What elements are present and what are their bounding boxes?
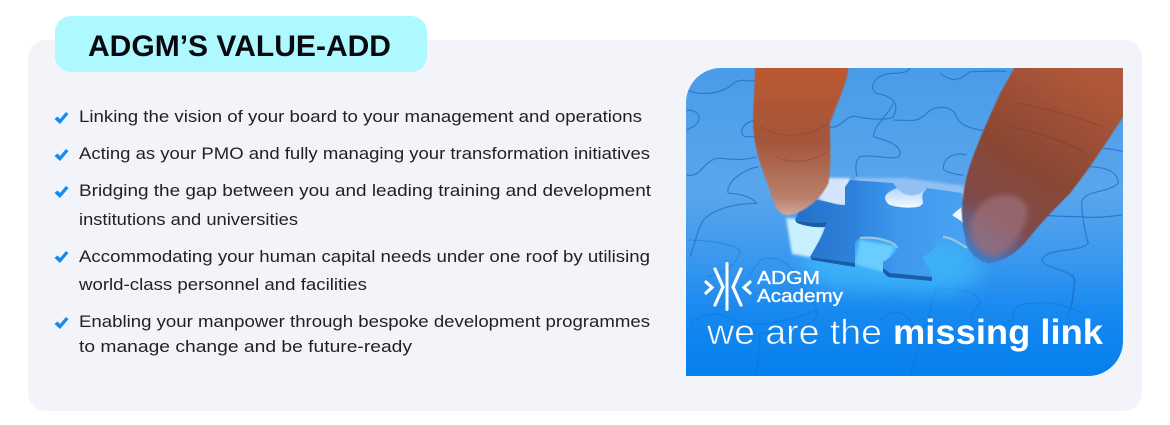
- bullet 5: [54, 312, 650, 356]
- puzzle seams: [687, 67, 1123, 307]
- logo: ADGM Academy: [706, 264, 843, 310]
- right finger: [962, 67, 1123, 263]
- bullet 3: institutions and universities: [79, 210, 298, 229]
- logo: ADGM Academy: ADGM: [757, 268, 820, 288]
- bullet 5: to manage change and be future-ready: [79, 337, 413, 356]
- bullet 3: Bridging the gap between you and leading training and development: [79, 181, 651, 200]
- image panel: puzzle with fingers: [686, 67, 1123, 377]
- tagline: we are the missing link: [706, 313, 1104, 352]
- bullet 1: Linking the vision of your board to your management and operations: [79, 107, 642, 126]
- lifted puzzle piece: [795, 180, 967, 281]
- bullet 5: Enabling your manpower through bespoke development programmes: [79, 312, 650, 331]
- heading pill: ADGM's Value-Add: [55, 16, 427, 72]
- list: value-add bullet points: [54, 107, 651, 356]
- icon: logo mark: [706, 264, 750, 310]
- white notch gap: [885, 188, 927, 208]
- heading pill: ADGM's Value-Add: ADGM’S VALUE-ADD: [88, 30, 391, 63]
- lit area behind the puzzle piece: [786, 178, 985, 292]
- tagline: we are the missing link: we are the: [706, 313, 882, 352]
- bullet 2: Acting as your PMO and fully managing your transformation initiatives: [79, 144, 650, 163]
- bullet 4: world-class personnel and facilities: [78, 275, 367, 294]
- tagline: we are the missing link: missing link: [893, 313, 1104, 352]
- bullet 4: [54, 247, 650, 294]
- left finger: [753, 67, 848, 215]
- bullet 4: Accommodating your human capital needs under one roof by utilising: [79, 247, 650, 266]
- bullet 3: [54, 181, 651, 229]
- logo: ADGM Academy: Academy: [757, 286, 843, 306]
